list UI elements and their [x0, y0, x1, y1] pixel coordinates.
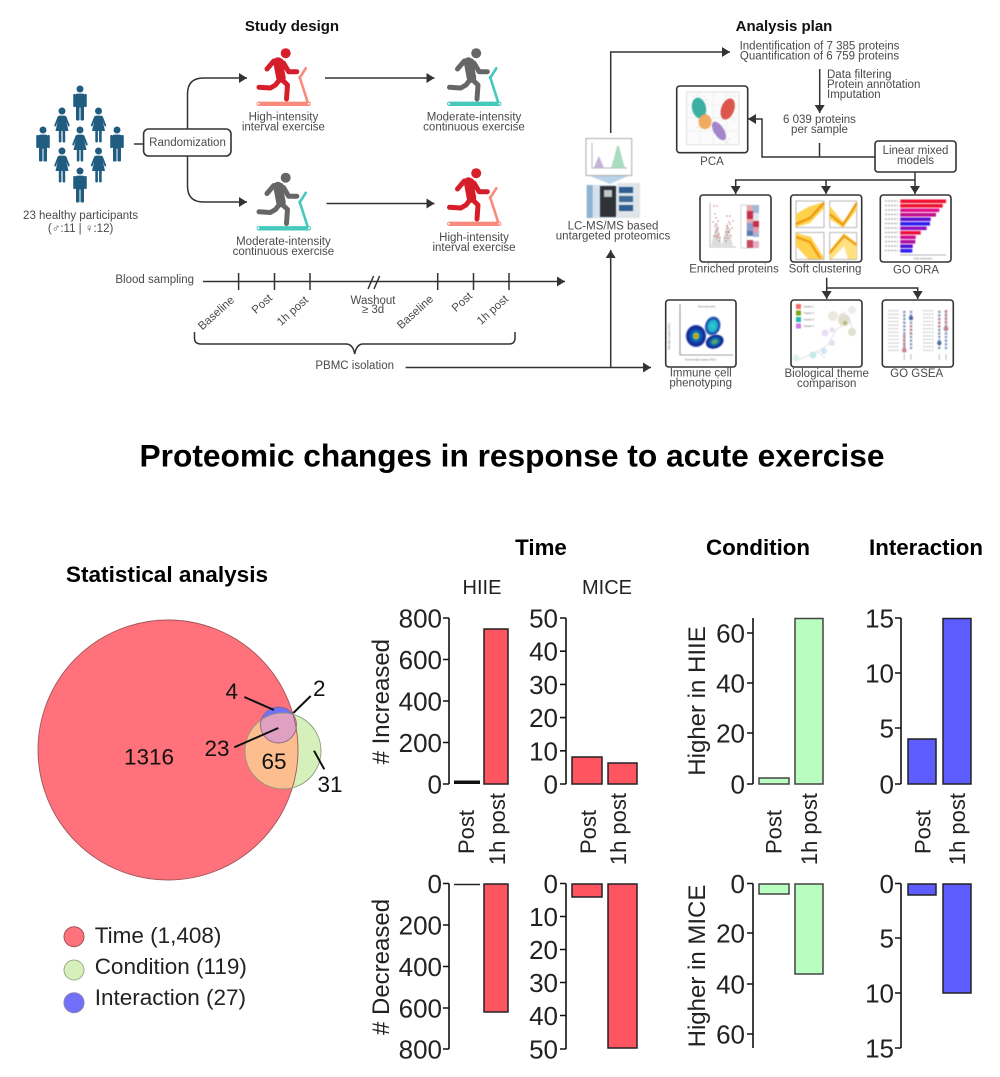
chart: HIIE decreased: 200 [399, 910, 442, 940]
column headings [463, 535, 983, 599]
icon: HIIE runner, arm 1 [256, 48, 311, 106]
venn counts [124, 676, 343, 797]
arrow: filtering [819, 69, 821, 113]
panel: biological theme comparison: Cluster 2 [804, 311, 814, 315]
chart: MICE decreased: 10 [529, 902, 558, 932]
label: HIIE arm 1: interval exercise [242, 122, 325, 134]
label: enriched proteins: Enriched proteins [689, 264, 779, 276]
chart: interaction increased: 0 [880, 770, 894, 800]
label: MICE arm 1: continuous exercise [423, 122, 525, 134]
legend: Condition (119) [95, 954, 247, 979]
column headings: MICE [582, 577, 632, 599]
chart: MICE increased: 10 [529, 736, 558, 766]
heading: statistical analysis: Statistical analysis [66, 562, 268, 587]
randomization box with branches [134, 78, 247, 202]
chart: condition higher in HIIE: 0 [731, 770, 745, 800]
chart: condition higher in MICE: 60 [716, 1020, 745, 1050]
panel: biological theme comparison: Cluster 4 [804, 324, 814, 328]
chart: condition higher in HIIE: Higher in HIIE [684, 626, 711, 776]
label: immune cell phenotyping: Immune cell [670, 368, 732, 380]
main title: Proteomic changes in response to acute exercise [140, 438, 884, 474]
panel: PCA [677, 86, 748, 153]
label: MICE arm 2: continuous exercise [233, 246, 334, 258]
column headings: Condition [706, 535, 810, 560]
label: HIIE arm 2 [432, 232, 516, 254]
timeline: blood sampling: Baseline [196, 294, 237, 333]
chart: interaction increased: 15 [865, 604, 894, 634]
timeline: blood sampling: Blood sampling [115, 274, 194, 286]
panel: enriched proteins [700, 195, 771, 262]
timeline: blood sampling: Post [250, 292, 276, 317]
box: linear mixed models [875, 141, 956, 172]
brace: PBMC isolation [194, 250, 651, 372]
arrow: HIIE to MICE [325, 77, 434, 79]
chart: HIIE increased: 200 [399, 728, 442, 758]
text: participants [23, 210, 138, 235]
legend: Interaction (27) [95, 985, 246, 1010]
column headings: HIIE [463, 577, 501, 599]
chart: interaction decreased: 0 [880, 869, 894, 899]
venn diagram [38, 620, 343, 880]
column headings: Interaction [869, 535, 983, 560]
label: immune cell phenotyping [669, 368, 732, 390]
brace: PBMC isolation: PBMC isolation [315, 360, 394, 372]
panel: biological theme comparison [791, 300, 862, 367]
icon: LC-MS/MS instrument with spectrum [586, 138, 640, 218]
chart: condition higher in HIIE: 40 [716, 668, 745, 698]
panel: biological theme comparison: Cluster 1 [804, 304, 814, 308]
chart: MICE increased: 40 [529, 637, 558, 667]
label: MICE arm 2 [233, 236, 334, 258]
venn counts: 4 [225, 679, 238, 704]
chart: MICE increased: 1h post [606, 793, 631, 865]
label: soft clustering: Soft clustering [789, 264, 861, 276]
box: linear mixed models: Linear mixed [883, 145, 948, 157]
text: proteins per sample [783, 114, 856, 136]
chart: interaction increased: 5 [880, 714, 894, 744]
label: MICE arm 1: Moderate-intensity [427, 112, 522, 124]
chart: condition higher in MICE [684, 869, 823, 1050]
chart: condition higher in HIIE: 20 [716, 718, 745, 748]
label: LC-MS/MS: untargeted proteomics [556, 230, 670, 242]
arrow: proteomics to identification [611, 52, 730, 133]
icon: MICE runner, arm 1 [447, 48, 502, 106]
text: filtering steps: Imputation [827, 89, 881, 101]
label: PCA: PCA [700, 156, 724, 168]
timeline: blood sampling: 1h post [275, 294, 312, 328]
label: GO GSEA: GO GSEA [890, 368, 944, 380]
chart: MICE decreased [529, 869, 637, 1064]
label: HIIE arm 2: interval exercise [432, 242, 516, 254]
chart: HIIE increased: Post [454, 810, 479, 854]
chart: HIIE decreased: # Decreased [368, 899, 395, 1035]
venn counts: 65 [261, 749, 287, 774]
legend: Time (1,408) [95, 923, 221, 948]
panel: GO GSEA [882, 300, 953, 367]
chart: condition higher in HIIE [684, 618, 823, 865]
chart: MICE decreased: 50 [529, 1034, 558, 1064]
venn counts: 2 [313, 676, 326, 701]
label: MICE arm 2: Moderate-intensity [236, 236, 331, 248]
connectors: linear mixed models to PCA [748, 119, 875, 157]
chart: HIIE decreased: 400 [399, 952, 442, 982]
heading: analysis plan: Analysis plan [736, 18, 832, 35]
randomization box with branches: Randomization [149, 137, 226, 149]
chart: MICE increased: 20 [529, 703, 558, 733]
chart: MICE decreased: 20 [529, 935, 558, 965]
icon: group of 23 participants [37, 86, 123, 202]
panel: soft clustering [791, 195, 862, 262]
chart: HIIE decreased: 800 [399, 1034, 442, 1064]
panel: immune cell phenotyping: Side light scatter (SSC) [667, 323, 671, 350]
label: HIIE arm 1 [242, 112, 325, 134]
label: biological theme comparison: Biological theme [785, 368, 869, 380]
label: HIIE arm 1: High-intensity [249, 112, 318, 124]
chart: MICE increased: 50 [529, 604, 558, 634]
chart: MICE increased: Post [576, 810, 601, 854]
panel: GO ORA [880, 195, 951, 262]
connectors: soft clustering to themes and GSEA [827, 278, 918, 299]
heading: study design: Study design [245, 18, 339, 35]
panel: GO ORA: Fold enrichment [914, 256, 933, 260]
venn counts: 31 [317, 772, 343, 797]
connectors: models to plots [736, 172, 915, 194]
label: LC-MS/MS [556, 220, 670, 242]
text: filtering steps [827, 69, 920, 101]
chart: HIIE increased: 0 [428, 770, 442, 800]
panel: biological theme comparison: Cluster 3 [804, 318, 814, 322]
chart: interaction decreased: 5 [880, 924, 894, 954]
box: linear mixed models: models [897, 155, 934, 167]
text: participants: 23 healthy participants [23, 210, 138, 222]
chart: HIIE decreased [368, 869, 508, 1064]
chart: condition higher in MICE: 40 [716, 970, 745, 1000]
text: proteins per sample: 6 039 proteins [783, 114, 856, 126]
chart: interaction increased: 1h post [945, 793, 970, 865]
label: GO ORA: GO ORA [893, 264, 939, 276]
chart: condition higher in MICE: 0 [731, 869, 745, 899]
arm 2: MICE then HIIE [233, 168, 516, 258]
text: filtering steps: Protein annotation [827, 79, 920, 91]
chart: interaction increased: 10 [865, 658, 894, 688]
chart: HIIE decreased: 0 [428, 869, 442, 899]
arrow: MICE to HIIE [326, 202, 434, 204]
label: MICE arm 1 [423, 112, 525, 134]
label: immune cell phenotyping: phenotyping [669, 378, 732, 390]
icon: MICE runner, arm 2 [256, 173, 311, 230]
label: LC-MS/MS: LC-MS/MS based [568, 220, 658, 232]
text: identification and quantification: Quantification of 6 759 proteins [740, 50, 899, 62]
chart: condition higher in HIIE: 60 [716, 618, 745, 648]
chart: condition higher in HIIE: Post [762, 810, 786, 854]
panel: immune cell phenotyping: Forward light scatter (FSC) [685, 358, 716, 362]
chart: MICE decreased: 30 [529, 968, 558, 998]
venn counts: 23 [204, 736, 230, 761]
text: proteins per sample: per sample [791, 124, 848, 136]
chart: MICE increased [529, 604, 637, 865]
panel: immune cell phenotyping: Flow cytometry [698, 304, 716, 308]
chart: MICE decreased: 0 [544, 869, 558, 899]
chart: interaction decreased: 10 [865, 978, 894, 1008]
chart: condition higher in HIIE: 1h post [797, 793, 822, 865]
chart: interaction decreased [865, 869, 971, 1064]
chart: interaction increased: Post [910, 810, 936, 854]
timeline: blood sampling: Post [450, 290, 476, 315]
chart: HIIE increased: 400 [399, 686, 442, 716]
label: biological theme comparison [785, 368, 869, 390]
label: biological theme comparison: comparison [797, 378, 856, 390]
chart: interaction decreased: 15 [865, 1034, 894, 1064]
text: identification and quantification [740, 40, 900, 62]
chart: HIIE decreased: 600 [399, 994, 442, 1024]
text: filtering steps: Data filtering [827, 69, 892, 81]
venn counts: 1316 [124, 744, 174, 770]
chart: condition higher in MICE: Higher in MICE [684, 885, 711, 1047]
panel: immune cell phenotyping [666, 300, 736, 367]
chart: MICE decreased: 40 [529, 1001, 558, 1031]
chart: HIIE increased: 1h post [485, 793, 510, 865]
chart: HIIE increased: 600 [399, 645, 442, 675]
arm 1: HIIE then MICE [242, 48, 525, 134]
chart: MICE increased: 0 [544, 770, 558, 800]
chart: condition higher in MICE: 20 [716, 918, 745, 948]
text: participants: (♂:11 | ♀:12) [48, 223, 113, 235]
column headings: Time [515, 535, 567, 560]
chart: HIIE increased: # Increased [368, 639, 395, 764]
chart: HIIE increased: 800 [399, 604, 442, 634]
chart: interaction increased [865, 604, 971, 865]
icon: HIIE runner, arm 2 [447, 168, 502, 226]
timeline: blood sampling: ≥ 3d [362, 304, 384, 316]
legend [64, 923, 247, 1013]
timeline: blood sampling: 1h post [475, 293, 512, 327]
timeline: blood sampling [115, 273, 565, 333]
chart: MICE increased: 30 [529, 670, 558, 700]
timeline: blood sampling: Baseline [395, 293, 436, 332]
timeline: blood sampling: Washout [351, 295, 396, 307]
label: HIIE arm 2: High-intensity [439, 232, 509, 244]
text: identification and quantification: Indentification of 7 385 proteins [740, 40, 900, 52]
chart: HIIE increased [368, 604, 510, 865]
